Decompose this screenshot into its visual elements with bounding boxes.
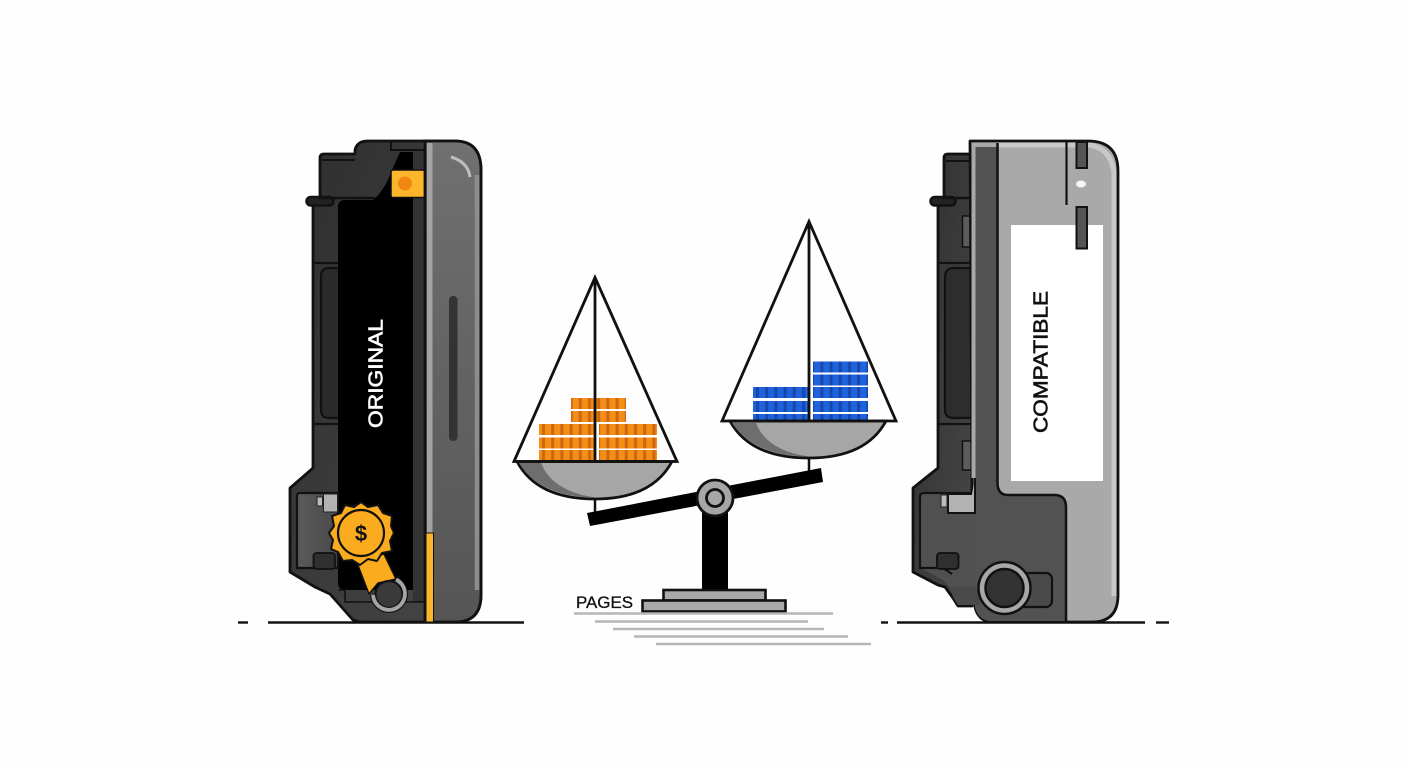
right bowl shadow (732, 423, 809, 456)
right bowl (730, 421, 886, 458)
right pan (722, 222, 896, 458)
spine outline (998, 143, 1066, 622)
white label (1011, 225, 1103, 481)
gray latch (948, 478, 975, 513)
lower left stack (539, 424, 594, 461)
award badge (329, 502, 405, 610)
pivot (697, 480, 733, 516)
lower notch fill (950, 587, 980, 605)
side panel dividers (313, 263, 338, 424)
PAGES label: PAGES (576, 594, 633, 612)
roller housing (1004, 573, 1052, 607)
left pan strings (514, 278, 677, 462)
top ledge (946, 160, 971, 162)
thin seam (1065, 142, 1068, 205)
left pan stem (594, 498, 596, 516)
short stack (753, 387, 808, 421)
side dividers (938, 263, 971, 424)
ORIGINAL text: ORIGINAL (364, 319, 388, 428)
dark rear body (913, 154, 972, 606)
scale post (702, 505, 728, 591)
badge seal (329, 502, 394, 565)
lower slot (1076, 207, 1087, 248)
recessed side panel (321, 268, 338, 418)
side clips (962, 216, 972, 470)
white indicator (1076, 180, 1086, 188)
right coin stacks (753, 362, 868, 421)
lower base (642, 600, 786, 612)
module outline (920, 493, 974, 574)
compatible cartridge (913, 141, 1118, 622)
bottom ledge (338, 590, 425, 602)
ring (373, 580, 405, 610)
left bowl shadow (519, 463, 595, 498)
lower module (297, 493, 338, 568)
small latch (941, 495, 947, 507)
left coin stacks (539, 398, 657, 461)
gold strip (426, 533, 434, 622)
dark button (314, 553, 335, 569)
left pan (514, 278, 677, 499)
roller (978, 562, 1030, 614)
ground line: left (238, 621, 524, 624)
dark button (937, 553, 958, 569)
ribbon (356, 554, 396, 594)
tilted beam (587, 468, 823, 526)
upper base (664, 590, 766, 600)
mounting tab (306, 197, 375, 206)
balance scale (514, 222, 896, 612)
main light shell (970, 141, 1118, 622)
tall stack (813, 362, 868, 421)
right pan strings (722, 222, 896, 421)
right edge highlight (475, 175, 479, 590)
black label (338, 152, 413, 590)
page lines (574, 614, 871, 644)
yellow chip (391, 170, 425, 198)
badge inner circle (338, 510, 384, 556)
top ledge (322, 141, 425, 160)
left bowl (517, 462, 672, 499)
right pan stem (808, 457, 810, 472)
dark spine and lower block (973, 147, 1066, 621)
gray latch (324, 494, 338, 512)
mounting tab (930, 197, 970, 206)
lower right stack (599, 424, 657, 461)
dollar sign: $ (355, 521, 367, 546)
chip dot (398, 176, 412, 190)
right face panel (425, 141, 481, 622)
left light edge (972, 143, 976, 478)
ground line: right (881, 621, 1169, 624)
corner highlight (451, 157, 470, 177)
top stack (571, 398, 626, 422)
COMPATIBLE text: COMPATIBLE (1030, 291, 1052, 433)
light edge band (427, 143, 432, 534)
recessed side panel (945, 268, 971, 418)
original cartridge (290, 141, 481, 622)
vertical slot (449, 296, 458, 441)
dark strip (413, 151, 425, 602)
small latch (317, 497, 322, 506)
cartridge body: original (290, 141, 481, 622)
top highlight (997, 145, 1114, 596)
lower module (920, 493, 977, 600)
upper slot (1076, 142, 1087, 168)
